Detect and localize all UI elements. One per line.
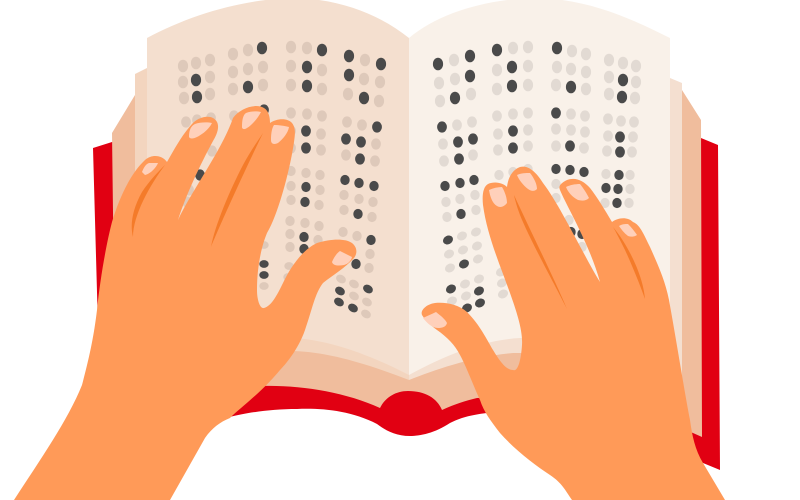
fingernails (423, 173, 637, 328)
left inner page stack (135, 68, 409, 380)
left hand (14, 106, 356, 500)
braille dots: right page (433, 41, 641, 314)
right inner page stack (409, 78, 682, 380)
left page (147, 0, 409, 375)
finger creases (132, 133, 263, 247)
fingernails (142, 111, 352, 266)
right page (409, 0, 670, 375)
braille dots: left page (178, 41, 386, 320)
book cover (93, 138, 720, 470)
finger creases (514, 195, 645, 309)
page block edge (112, 90, 702, 437)
right hand (422, 167, 725, 500)
